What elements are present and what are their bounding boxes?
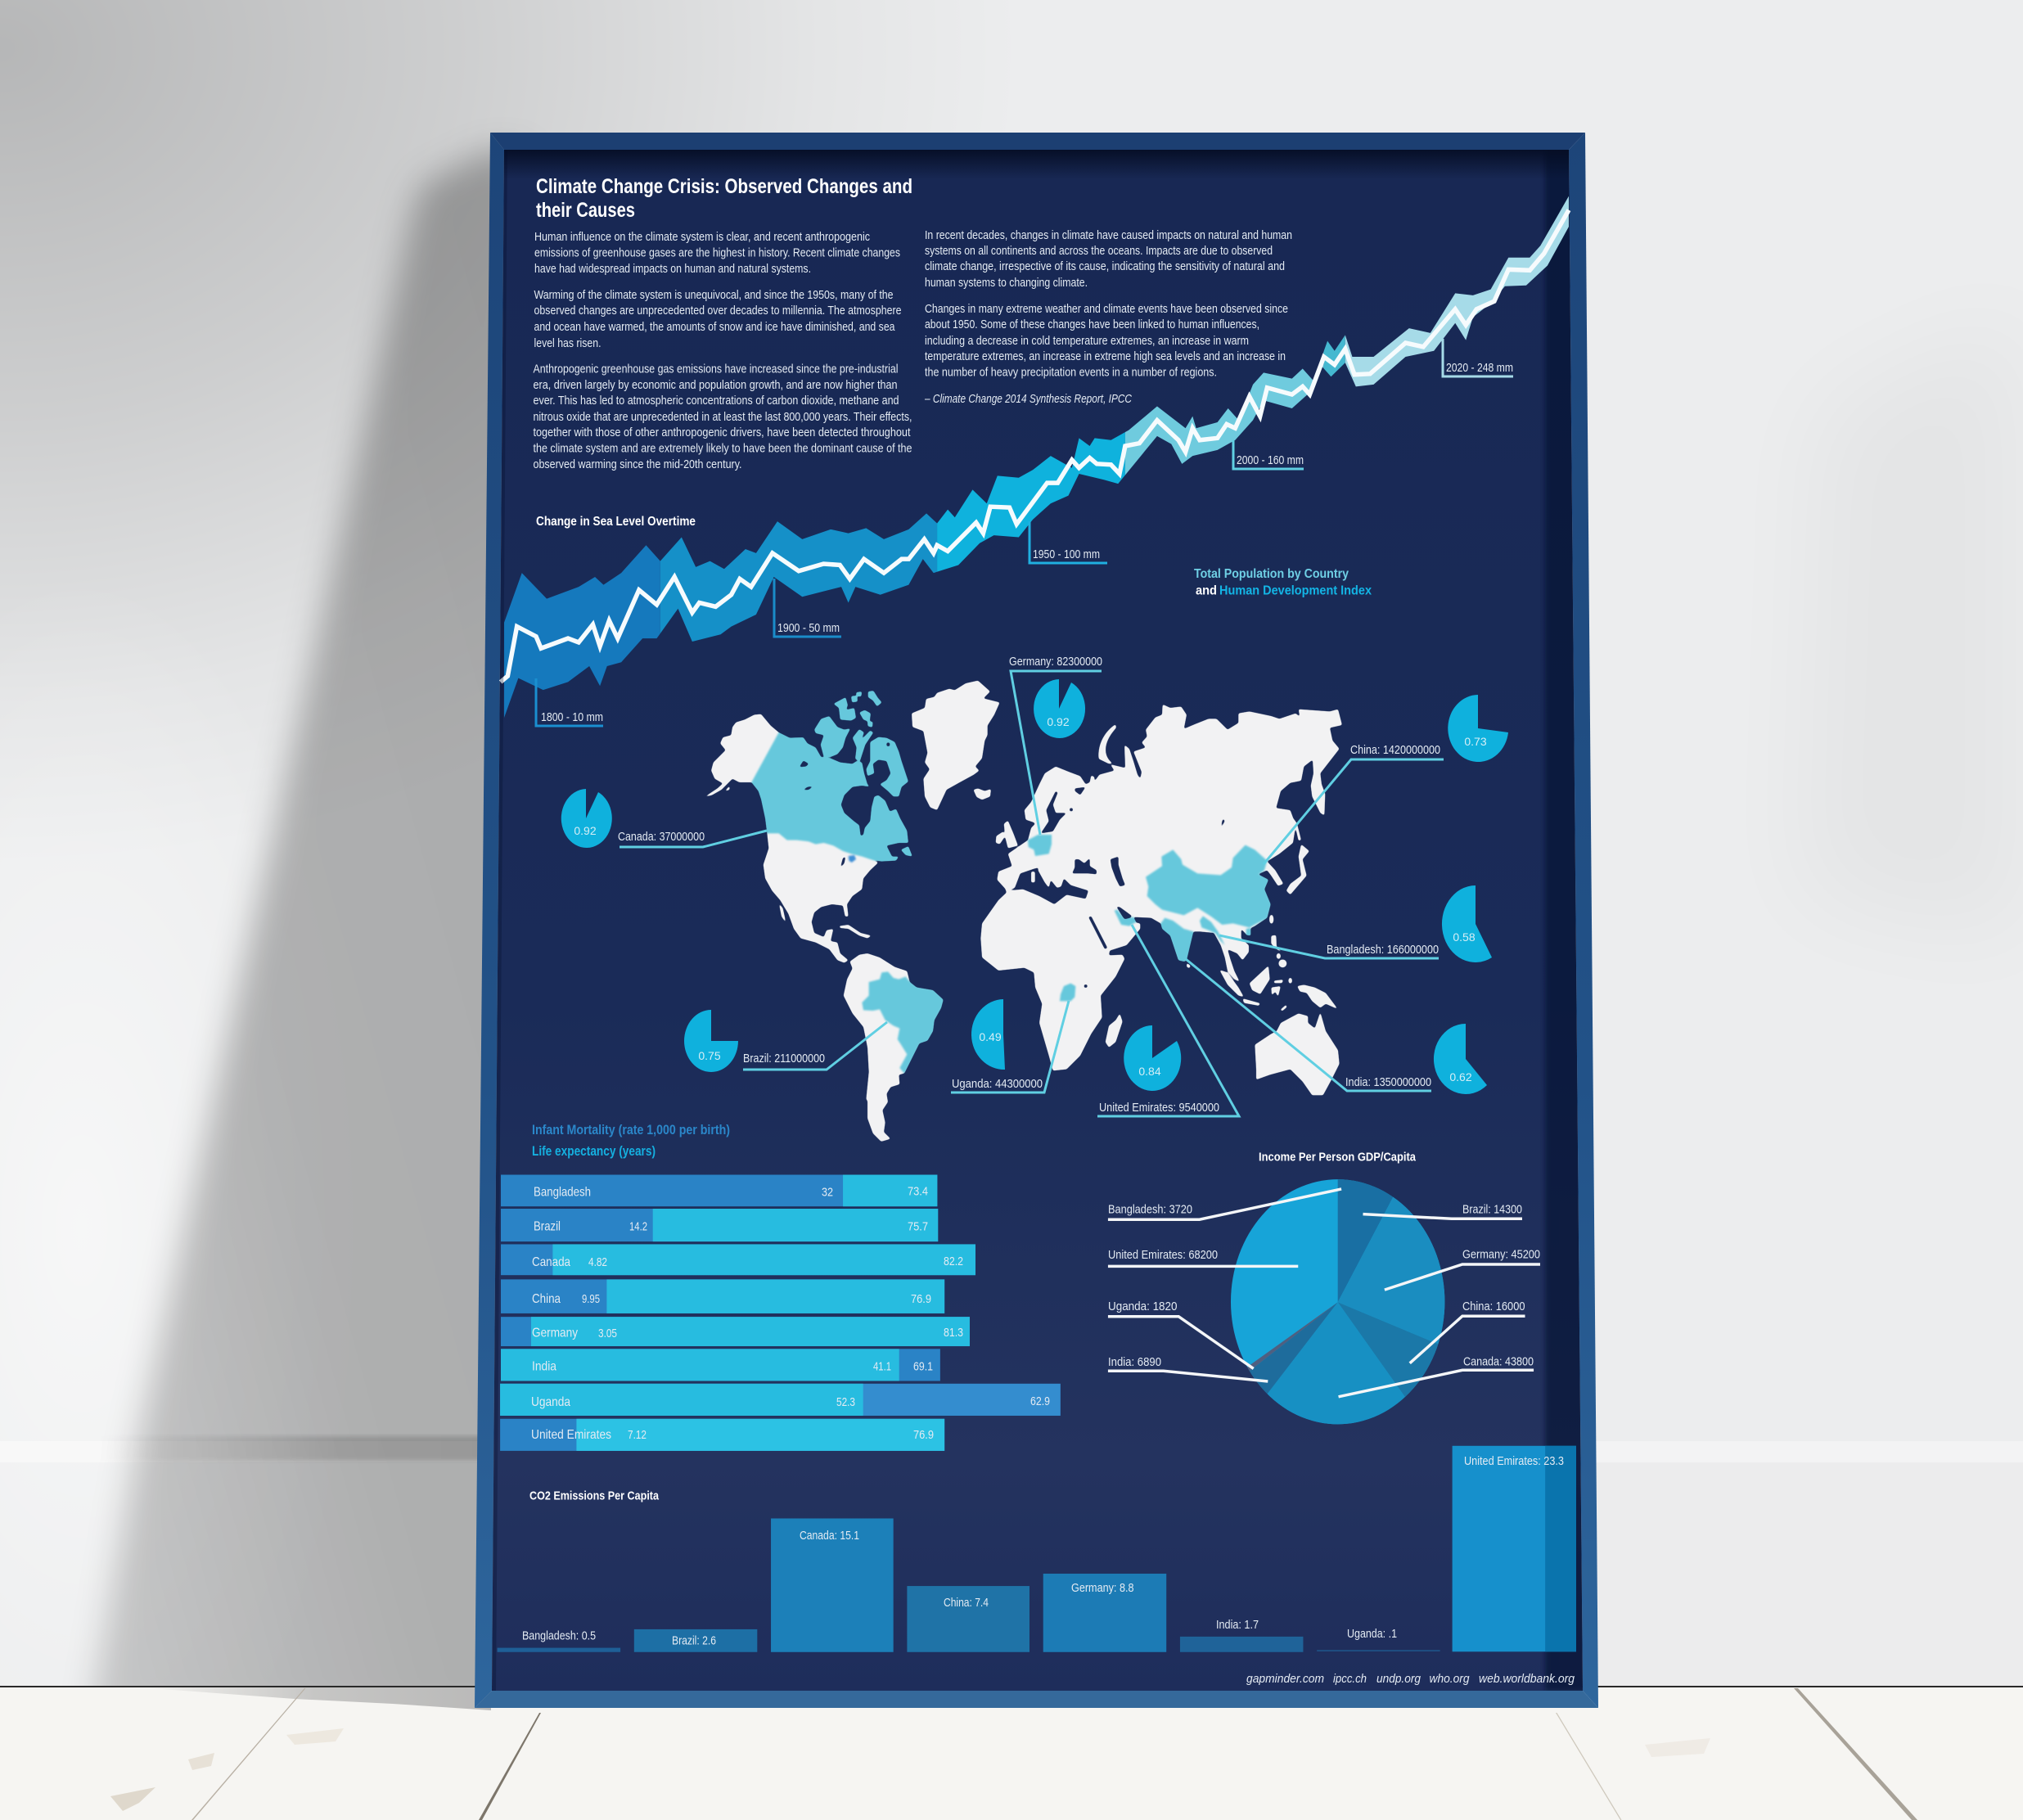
chart: sea level band xyxy=(499,196,1571,718)
map: Greenland, Iceland and Britain xyxy=(912,681,1018,849)
bar: Uganda xyxy=(531,1394,1050,1409)
heading: population and HDI: Human Development Index xyxy=(1219,584,1372,597)
chart: income pie xyxy=(1108,1179,1540,1424)
intro text left column: the climate system and are extremely likely to have been the dominant cause of the xyxy=(534,442,912,455)
CO2 labels: Germany: 8.8 xyxy=(1071,1581,1134,1595)
map: Uganda xyxy=(1060,984,1075,1001)
heading: population and HDI xyxy=(1194,567,1372,597)
map: North America xyxy=(704,691,912,963)
CO2 labels: Canada: 15.1 xyxy=(800,1529,859,1543)
bar: United Emirates: 7.12 xyxy=(628,1428,647,1442)
bar: United Emirates xyxy=(531,1428,934,1442)
bar: United Emirates: United Emirates xyxy=(531,1428,611,1442)
intro text right column: human systems to changing climate. xyxy=(925,276,1088,290)
map: Italy and Sardinia xyxy=(1031,865,1051,888)
poster xyxy=(483,150,1629,1691)
intro text left column: have had widespread impacts on human and natural systems. xyxy=(534,262,811,276)
CO2 labels: China: 7.4 xyxy=(944,1596,989,1610)
income labels: Bangladesh: 3720 xyxy=(1108,1203,1192,1216)
country: United Emirates: 0.84 xyxy=(1138,1065,1161,1078)
callout: 1900 xyxy=(774,579,841,637)
country: China xyxy=(1264,695,1508,864)
bar: Bangladesh xyxy=(534,1185,928,1200)
country: Bangladesh: Bangladesh: 166000000 xyxy=(1327,943,1439,957)
intro text left column: ever. This has led to atmospheric concentrations of carbon dioxide, methane and xyxy=(534,394,899,408)
income labels: China: 16000 xyxy=(1462,1300,1525,1313)
bar: Bangladesh: Bangladesh xyxy=(534,1185,591,1200)
intro text left column: nitrous oxide that are unprecedented in at least the last 800,000 years. Their effects, xyxy=(534,410,912,424)
heading: CO2: CO2 Emissions Per Capita xyxy=(529,1489,660,1502)
country: Uganda: Uganda: 44300000 xyxy=(952,1077,1043,1091)
sources: web.worldbank.org xyxy=(1479,1672,1575,1686)
heading: population and HDI: and xyxy=(1196,584,1217,597)
country: India: 0.62 xyxy=(1449,1070,1472,1083)
intro text right column: including a decrease in cold temperature extremes, an increase in warm xyxy=(925,334,1249,348)
map: Germany xyxy=(1028,835,1052,856)
income labels: India: 6890 xyxy=(1108,1355,1161,1369)
callout: 2000: 2000 - 160 mm xyxy=(1237,453,1304,467)
sources: undp.org xyxy=(1376,1672,1422,1686)
bar: United Emirates: 76.9 xyxy=(913,1428,934,1442)
intro text right column: Changes in many extreme weather and climate events have been observed since xyxy=(925,302,1288,316)
chart: CO2 bars xyxy=(498,1446,1576,1652)
country: United Emirates xyxy=(1097,925,1239,1116)
poster frame xyxy=(475,133,1598,1708)
map: Bangladesh xyxy=(1200,916,1225,945)
intro text left column: era, driven largely by economic and population growth, and are now higher than xyxy=(534,378,897,392)
country: United Emirates: United Emirates: 9540000 xyxy=(1099,1101,1219,1115)
map: India xyxy=(1160,918,1193,962)
map: Madagascar xyxy=(1106,1013,1123,1047)
callout: 2020: 2020 - 248 mm xyxy=(1446,361,1513,375)
bar: Brazil xyxy=(534,1219,928,1234)
intro text left column: Anthropogenic greenhouse gas emissions have increased since the pre-industrial xyxy=(534,362,899,376)
sources: gapminder.com xyxy=(1246,1672,1324,1686)
map: Australia and islands xyxy=(1219,915,1340,1095)
bar: China: 9.95 xyxy=(582,1292,600,1306)
bar: India: 41.1 xyxy=(873,1360,891,1373)
CO2 labels: Bangladesh: 0.5 xyxy=(522,1629,596,1643)
bar: China: China xyxy=(532,1292,561,1306)
map: Eurasia and Africa xyxy=(980,705,1342,1070)
callout: 2020 xyxy=(1443,339,1513,376)
CO2 labels: Uganda: .1 xyxy=(1347,1627,1397,1641)
country: India xyxy=(1186,959,1487,1094)
bar: Germany: 81.3 xyxy=(944,1326,963,1340)
baseboard xyxy=(0,1441,2023,1687)
bar: Brazil: 14.2 xyxy=(629,1219,647,1234)
frame cast shadow on wall xyxy=(90,151,524,1719)
CO2 labels xyxy=(522,1454,1564,1648)
intro text left column: Warming of the climate system is unequivocal, and since the 1950s, many of the xyxy=(534,288,894,302)
income labels: Uganda: 1820 xyxy=(1108,1300,1177,1313)
country: China: 0.73 xyxy=(1464,735,1487,748)
country: Germany: 0.92 xyxy=(1047,715,1070,728)
bar: Uganda: 52.3 xyxy=(836,1395,855,1409)
heading: population and HDI: Total Population by Country xyxy=(1194,567,1349,581)
bar: Uganda: Uganda xyxy=(531,1395,570,1409)
intro text right column: temperature extremes, an increase in extreme high sea levels and an increase in xyxy=(925,349,1286,363)
intro text right column: – Climate Change 2014 Synthesis Report, IPCC xyxy=(924,392,1132,406)
intro text left column: Human influence on the climate system is clear, and recent anthropogenic xyxy=(534,230,870,244)
country: Brazil: Brazil: 211000000 xyxy=(743,1052,825,1065)
map: Brazil xyxy=(862,971,944,1074)
intro text right column: about 1950. Some of these changes have been linked to human influences, xyxy=(925,318,1259,331)
intro text left column: observed warming since the mid-20th century. xyxy=(534,457,741,471)
intro text right column: the number of heavy precipitation events in a number of regions. xyxy=(925,365,1217,380)
sea level line xyxy=(501,210,1569,682)
CO2 labels: United Emirates: 23.3 xyxy=(1464,1454,1564,1468)
country: Uganda xyxy=(951,999,1069,1092)
bar: Germany xyxy=(532,1326,963,1340)
country: Uganda: 0.49 xyxy=(979,1030,1002,1043)
bar: Germany: 3.05 xyxy=(598,1327,617,1340)
income labels: Canada: 43800 xyxy=(1463,1355,1534,1368)
country: Canada: 0.92 xyxy=(574,824,597,837)
country: Brazil: 0.75 xyxy=(698,1049,721,1062)
country: Canada xyxy=(561,789,767,848)
intro text left column: emissions of greenhouse gases are the highest in history. Recent climate changes xyxy=(534,246,900,260)
sources: ipcc.ch xyxy=(1333,1672,1367,1686)
callout: 1950: 1950 - 100 mm xyxy=(1033,547,1100,561)
intro text right column: In recent decades, changes in climate have caused impacts on natural and human xyxy=(925,228,1292,242)
map: South America xyxy=(844,953,944,1142)
intro text right column xyxy=(924,228,1292,406)
country: China: China: 1420000000 xyxy=(1350,743,1440,757)
world map xyxy=(704,681,1342,1142)
heading: sea level: Change in Sea Level Overtime xyxy=(536,515,696,529)
intro text left column: level has risen. xyxy=(534,336,601,350)
title: their Causes xyxy=(536,199,635,222)
bar: Bangladesh: 73.4 xyxy=(908,1185,928,1198)
country: Bangladesh: 0.58 xyxy=(1453,930,1476,944)
chart: mortality and life expectancy bars xyxy=(500,1175,1061,1451)
intro text left column: together with those of other anthropogenic drivers, have been detected throughout xyxy=(534,426,911,439)
frame inner shadow xyxy=(488,150,1588,1691)
bar: China: 76.9 xyxy=(911,1292,931,1306)
intro text left column xyxy=(534,230,912,471)
legend: mortality and life expectancy: Life expectancy (years) xyxy=(532,1143,656,1159)
bar: Brazil: Brazil xyxy=(534,1219,561,1234)
title xyxy=(536,175,912,222)
bar: Uganda: 62.9 xyxy=(1030,1394,1050,1408)
callout: 2000 xyxy=(1233,440,1304,469)
bar: Canada: 4.82 xyxy=(588,1255,607,1269)
bar: Germany: Germany xyxy=(532,1326,578,1340)
income leader lines xyxy=(1108,1189,1540,1397)
callout: 1800: 1800 - 10 mm xyxy=(541,710,603,724)
bar: Bangladesh: 32 xyxy=(822,1185,833,1200)
country: Germany: Germany: 82300000 xyxy=(1009,655,1102,669)
callout: 1900: 1900 - 50 mm xyxy=(777,621,840,635)
title: Climate Change Crisis: Observed Changes and xyxy=(536,175,912,198)
income labels: United Emirates: 68200 xyxy=(1108,1248,1218,1262)
intro text left column: and ocean have warmed, the amounts of snow and ice have diminished, and sea xyxy=(534,320,895,334)
country: India: India: 1350000000 xyxy=(1345,1075,1431,1089)
bar: Brazil: 75.7 xyxy=(908,1219,928,1234)
wooden floor xyxy=(0,1686,2023,1820)
country: Germany xyxy=(1009,655,1102,835)
income labels xyxy=(1108,1203,1540,1369)
income labels: Germany: 45200 xyxy=(1462,1247,1540,1262)
legend: mortality and life expectancy xyxy=(532,1122,730,1159)
bar: Canada: 82.2 xyxy=(944,1255,963,1268)
CO2 labels: India: 1.7 xyxy=(1216,1618,1259,1632)
country: Bangladesh xyxy=(1219,885,1492,962)
heading: income: Income Per Person GDP/Capita xyxy=(1259,1151,1417,1164)
bar: India: 69.1 xyxy=(913,1360,933,1373)
callout: 1800 xyxy=(536,678,603,726)
intro text left column: observed changes are unprecedented over decades to millennia. The atmosphere xyxy=(534,304,902,318)
bar: China xyxy=(532,1292,931,1306)
map: China xyxy=(1146,845,1271,927)
intro text right column: systems on all continents and across the oceans. Impacts are due to observed xyxy=(925,244,1273,258)
sources xyxy=(1246,1672,1575,1686)
country: Canada: Canada: 37000000 xyxy=(618,830,705,844)
callout: 1950 xyxy=(1030,521,1107,563)
bar: India xyxy=(532,1360,933,1373)
country: Brazil xyxy=(684,1010,887,1072)
bar: Canada: Canada xyxy=(532,1255,570,1269)
bar: India: India xyxy=(532,1360,556,1373)
intro text right column: climate change, irrespective of its cause, indicating the sensitivity of natural and xyxy=(925,259,1285,273)
map: United Emirates xyxy=(1115,910,1136,926)
legend: mortality and life expectancy: Infant Mortality (rate 1,000 per birth) xyxy=(532,1122,730,1138)
income labels: Brazil: 14300 xyxy=(1462,1203,1522,1216)
CO2 labels: Brazil: 2.6 xyxy=(672,1633,716,1648)
sources: who.org xyxy=(1429,1672,1470,1686)
bar: Canada xyxy=(532,1255,963,1269)
